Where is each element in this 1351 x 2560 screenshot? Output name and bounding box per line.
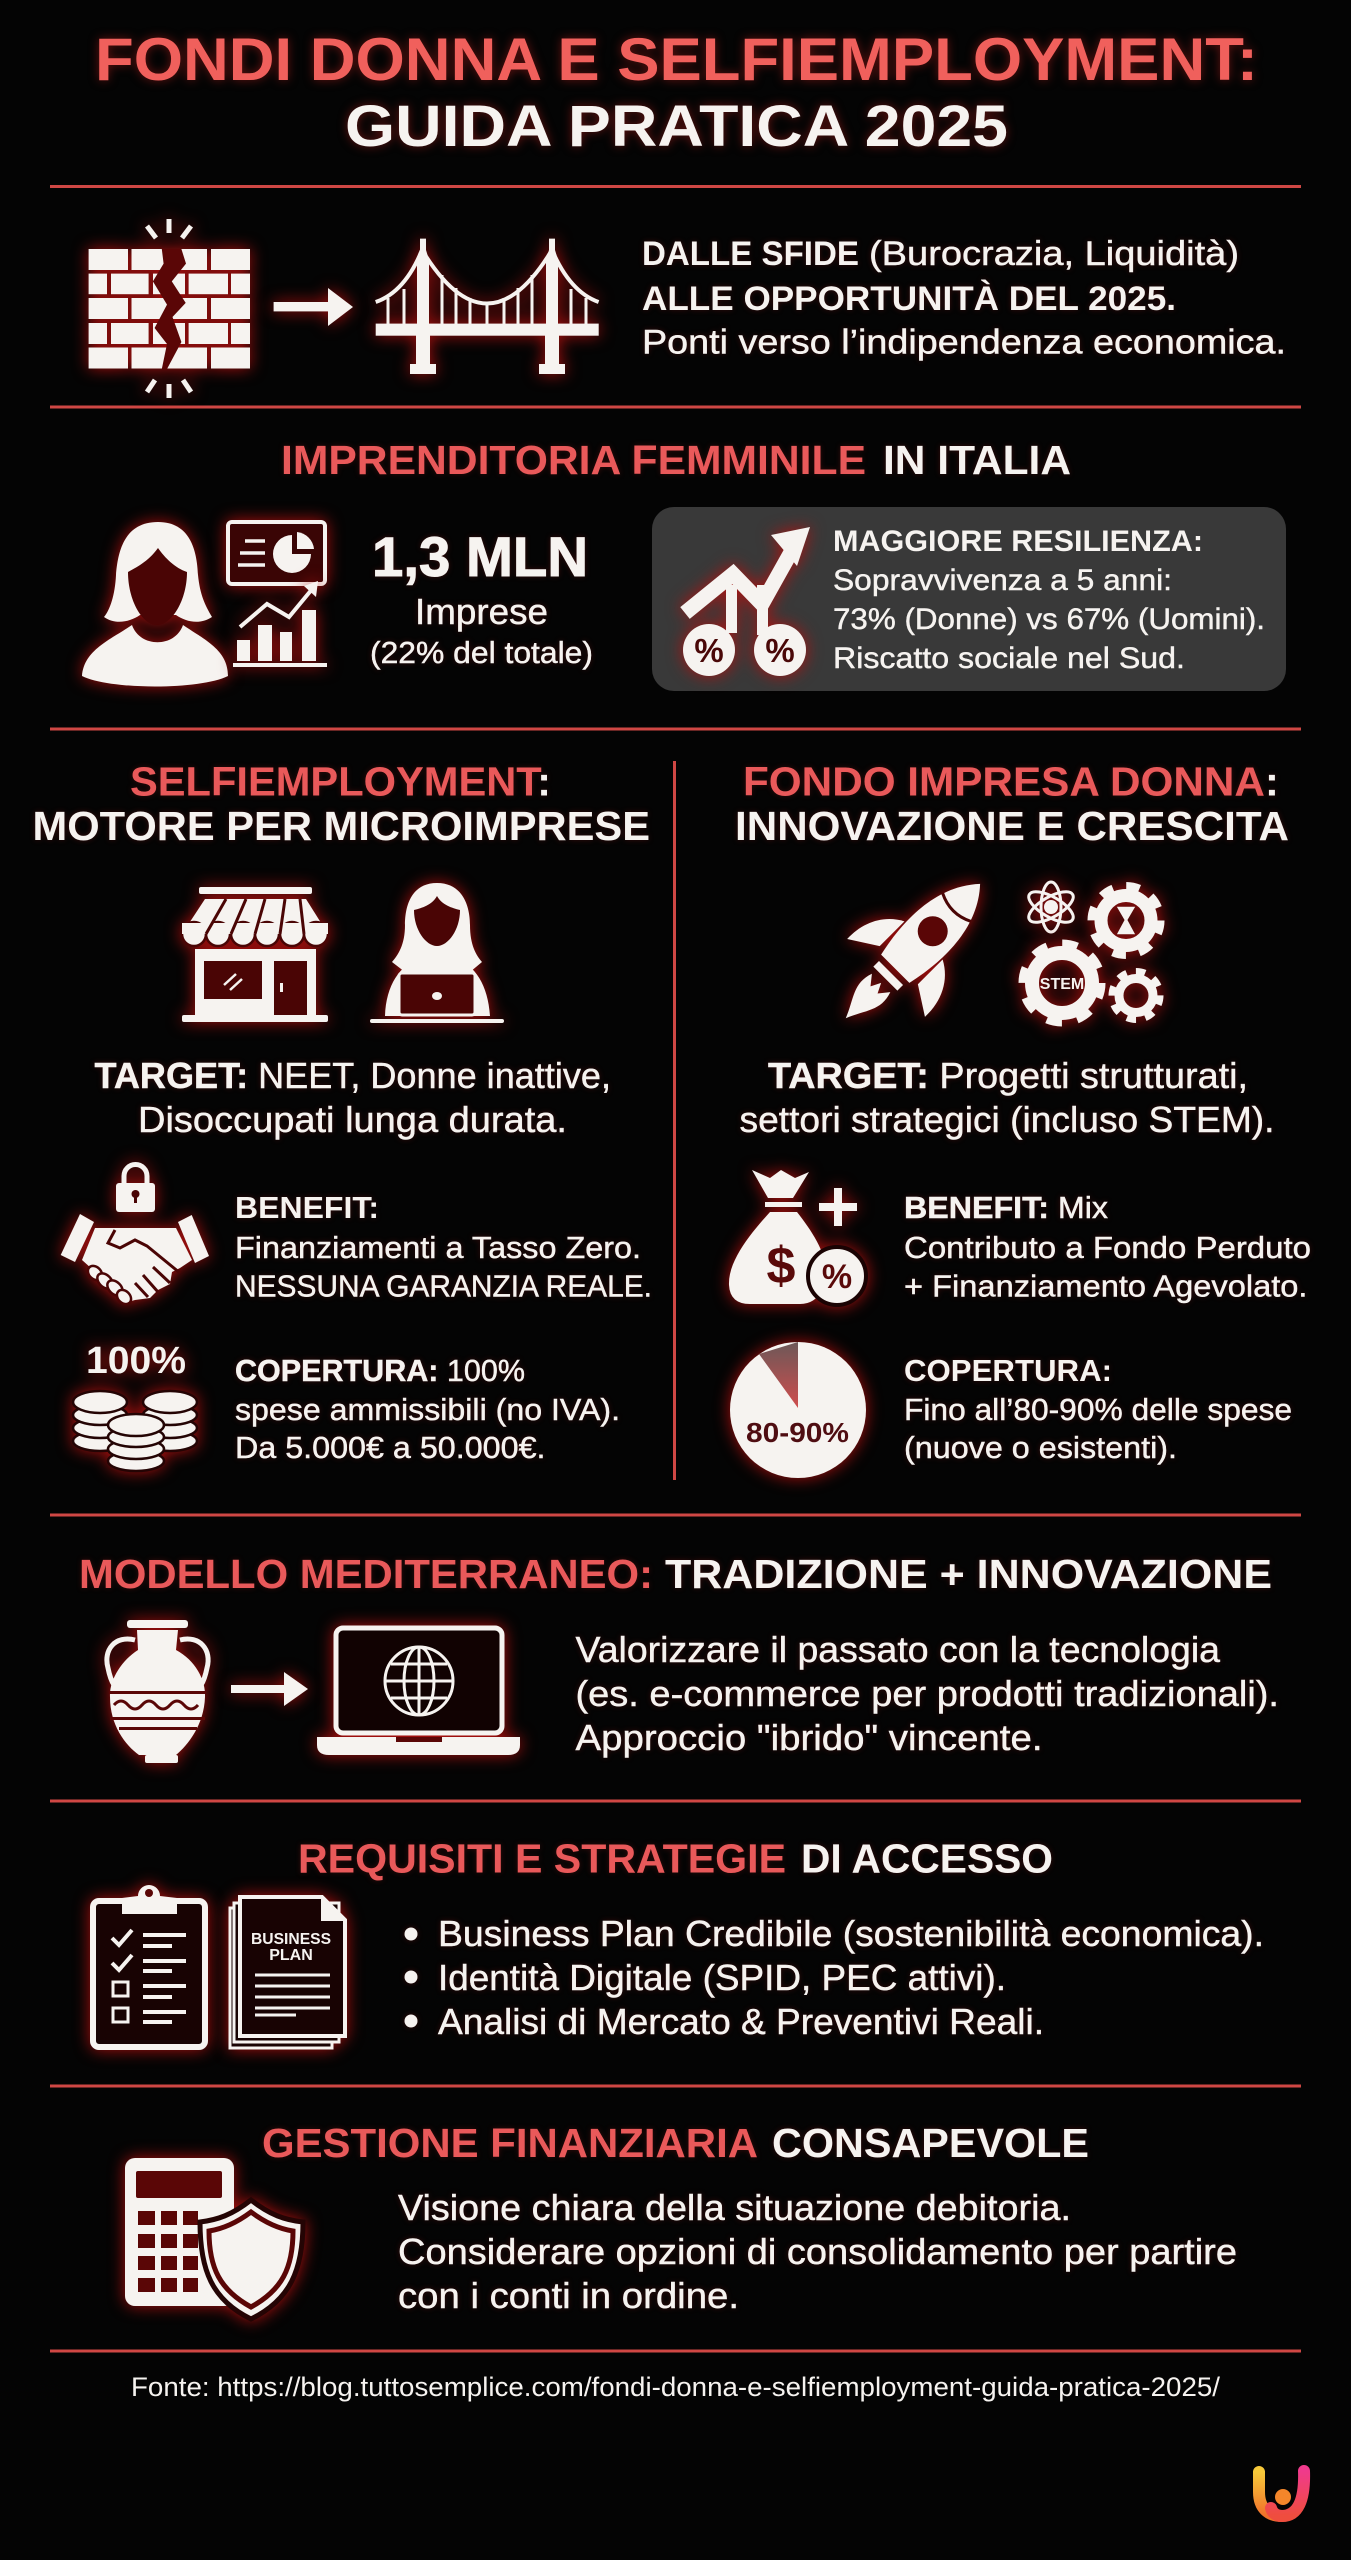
text: copertura fondo impresa donna: COPERTURA: — [904, 1353, 1112, 1388]
icon: amphora — [107, 1620, 208, 1763]
heading: gestione finanziaria: CONSAPEVOLE — [772, 2120, 1089, 2166]
text: benefit fondo impresa donna: Contributo a Fondo Perduto — [904, 1230, 1311, 1265]
text: resilienza: Sopravvivenza a 5 anni: — [833, 564, 1172, 597]
text: target fondo impresa donna: TARGET: Progetti strutturati, — [768, 1055, 1248, 1096]
text: target selfiemployment: Disoccupati lunga durata. — [138, 1099, 567, 1140]
icon: clipboard checklist — [93, 1885, 205, 2047]
text: modello mediterraneo: Valorizzare il passato con la tecnologia — [576, 1629, 1221, 1670]
title: FONDI DONNA E SELFIEMPLOYMENT: — [95, 26, 1258, 93]
bullet list: requisiti — [404, 1913, 1264, 2042]
text: copertura selfiemployment: spese ammissibili (no IVA). — [235, 1392, 620, 1427]
text: benefit selfiemployment — [235, 1190, 652, 1304]
text: resilienza: 73% (Donne) vs 67% (Uomini). — [833, 603, 1265, 636]
text: target fondo impresa donna: settori strategici (incluso STEM). — [740, 1099, 1274, 1140]
bullet list: requisiti: Identità Digitale (SPID, PEC attivi). — [438, 1957, 1006, 1998]
icon: gears with hourglass and STEM — [1023, 886, 1160, 1022]
bullet list: requisiti: Business Plan Credibile (sostenibilità economica). — [438, 1913, 1264, 1954]
text: modello mediterraneo — [576, 1629, 1279, 1758]
heading: modello mediterraneo: MODELLO MEDITERRANEO: — [79, 1551, 653, 1597]
logo — [1259, 2471, 1304, 2516]
icon: growth bar chart — [233, 581, 327, 667]
text: target selfiemployment: TARGET: NEET, Donne inattive, — [94, 1055, 611, 1096]
panel: maggiore resilienza — [652, 507, 1286, 691]
stat: 1,3 MLN imprese: 1,3 MLN — [372, 525, 588, 588]
icon: rising arrow with percent coins — [683, 527, 810, 676]
text: benefit fondo impresa donna — [904, 1190, 1311, 1304]
text: gestione finanziaria — [398, 2187, 1237, 2316]
heading: gestione finanziaria — [262, 2120, 1089, 2166]
icon: money bag with plus and percent: $ — [767, 1237, 796, 1295]
stat: 1,3 MLN imprese — [370, 525, 593, 670]
stat: 1,3 MLN imprese: (22% del totale) — [370, 635, 593, 670]
title — [95, 26, 1258, 159]
text: copertura selfiemployment — [235, 1353, 620, 1465]
heading: requisiti e strategie: DI ACCESSO — [801, 1836, 1053, 1882]
icon: 80-90% pie chart: 80-90% — [746, 1417, 849, 1448]
text: resilienza: Riscatto sociale nel Sud. — [833, 642, 1185, 675]
icon: business plan document: PLAN — [269, 1947, 313, 1964]
intro text — [642, 235, 1286, 362]
icon: cracked brick wall — [89, 219, 250, 398]
icon: business plan document: BUSINESS — [251, 1931, 331, 1948]
icon: suspension bridge — [376, 239, 599, 374]
text: benefit fondo impresa donna: BENEFIT: Mix — [904, 1190, 1109, 1225]
icon: businesswoman — [82, 522, 228, 686]
heading: modello mediterraneo: TRADIZIONE + INNOVAZIONE — [665, 1551, 1272, 1597]
text: resilienza: MAGGIORE RESILIENZA: — [833, 525, 1203, 558]
icon: stacks of coins 100%: 100% — [86, 1340, 186, 1382]
heading: imprenditoria femminile: IMPRENDITORIA FEMMINILE — [281, 437, 866, 483]
text: copertura selfiemployment: COPERTURA: 100% — [235, 1353, 525, 1388]
icon: laptop with globe — [317, 1628, 520, 1755]
heading: selfiemployment: MOTORE PER MICROIMPRESE — [32, 803, 650, 849]
icon: rocket — [807, 845, 1019, 1057]
heading: selfiemployment — [32, 758, 650, 849]
icon: atom — [1024, 882, 1078, 932]
text: gestione finanziaria: con i conti in ordine. — [398, 2275, 739, 2316]
intro text: Ponti verso l’indipendenza economica. — [642, 324, 1286, 362]
text: gestione finanziaria: Considerare opzioni di consolidamento per partire — [398, 2231, 1237, 2272]
heading: imprenditoria femminile: IN ITALIA — [883, 437, 1071, 483]
text: benefit selfiemployment: BENEFIT: — [235, 1190, 379, 1225]
text: modello mediterraneo: Approccio "ibrido" vincente. — [576, 1717, 1042, 1758]
icon: dashboard with pie chart — [228, 522, 325, 584]
heading: gestione finanziaria: GESTIONE FINANZIARIA — [262, 2120, 758, 2166]
text: target fondo impresa donna — [740, 1055, 1274, 1140]
text: copertura fondo impresa donna: Fino all’80-90% delle spese — [904, 1392, 1292, 1427]
text: benefit selfiemployment: NESSUNA GARANZIA REALE. — [235, 1268, 652, 1304]
heading: modello mediterraneo — [79, 1551, 1272, 1597]
source line: Fonte: https://blog.tuttosemplice.com/fondi-donna-e-selfiemployment-guida-pratica-2025/ — [131, 2372, 1221, 2402]
icon: woman at laptop — [370, 883, 504, 1023]
icon: gears with hourglass and STEM: STEM — [1040, 976, 1084, 993]
heading: fondo impresa donna: INNOVAZIONE E CRESCITA — [735, 803, 1289, 849]
icon: money bag with plus and percent — [729, 1170, 866, 1305]
title: GUIDA PRATICA 2025 — [345, 94, 1008, 159]
stat: 1,3 MLN imprese: Imprese — [415, 591, 548, 632]
intro text: DALLE SFIDE — [642, 235, 859, 273]
text: benefit fondo impresa donna: + Finanziamento Agevolato. — [904, 1268, 1308, 1304]
arrow: wall to bridge — [274, 288, 353, 326]
text: copertura fondo impresa donna: (nuove o esistenti). — [904, 1430, 1177, 1465]
text: target selfiemployment — [94, 1055, 611, 1140]
icon: shop — [182, 887, 328, 1022]
text: resilienza — [833, 525, 1265, 675]
heading: requisiti e strategie: REQUISITI E STRATEGIE — [298, 1836, 786, 1882]
heading: fondo impresa donna: FONDO IMPRESA DONNA : — [743, 758, 1279, 804]
intro text: (Burocrazia, Liquidità) — [869, 235, 1239, 273]
arrow: amphora to laptop — [231, 1672, 308, 1706]
intro text: ALLE OPPORTUNITÀ DEL 2025. — [642, 280, 1176, 318]
icon: business plan document — [230, 1897, 345, 2048]
icon: rising arrow with percent coins: % — [765, 632, 795, 669]
icon: padlock and handshake — [61, 1164, 209, 1307]
icon: rising arrow with percent coins: % — [694, 632, 724, 669]
text: copertura fondo impresa donna — [904, 1353, 1292, 1465]
text: benefit selfiemployment: Finanziamenti a Tasso Zero. — [235, 1230, 641, 1265]
text: gestione finanziaria: Visione chiara della situazione debitoria. — [398, 2187, 1071, 2228]
icon: 80-90% pie chart — [730, 1342, 866, 1478]
icon: stacks of coins 100% — [73, 1340, 197, 1471]
heading: fondo impresa donna — [735, 758, 1289, 849]
heading: selfiemployment: SELFIEMPLOYMENT: — [130, 758, 551, 804]
text: modello mediterraneo: (es. e-commerce per prodotti tradizionali). — [576, 1673, 1279, 1714]
text: copertura selfiemployment: Da 5.000€ a 50.000€. — [235, 1430, 546, 1465]
bullet list: requisiti: Analisi di Mercato & Preventivi Reali. — [438, 2001, 1044, 2042]
icon: calculator and shield — [125, 2158, 303, 2319]
icon: money bag with plus and percent: % — [822, 1258, 852, 1296]
heading: requisiti e strategie — [298, 1836, 1053, 1882]
